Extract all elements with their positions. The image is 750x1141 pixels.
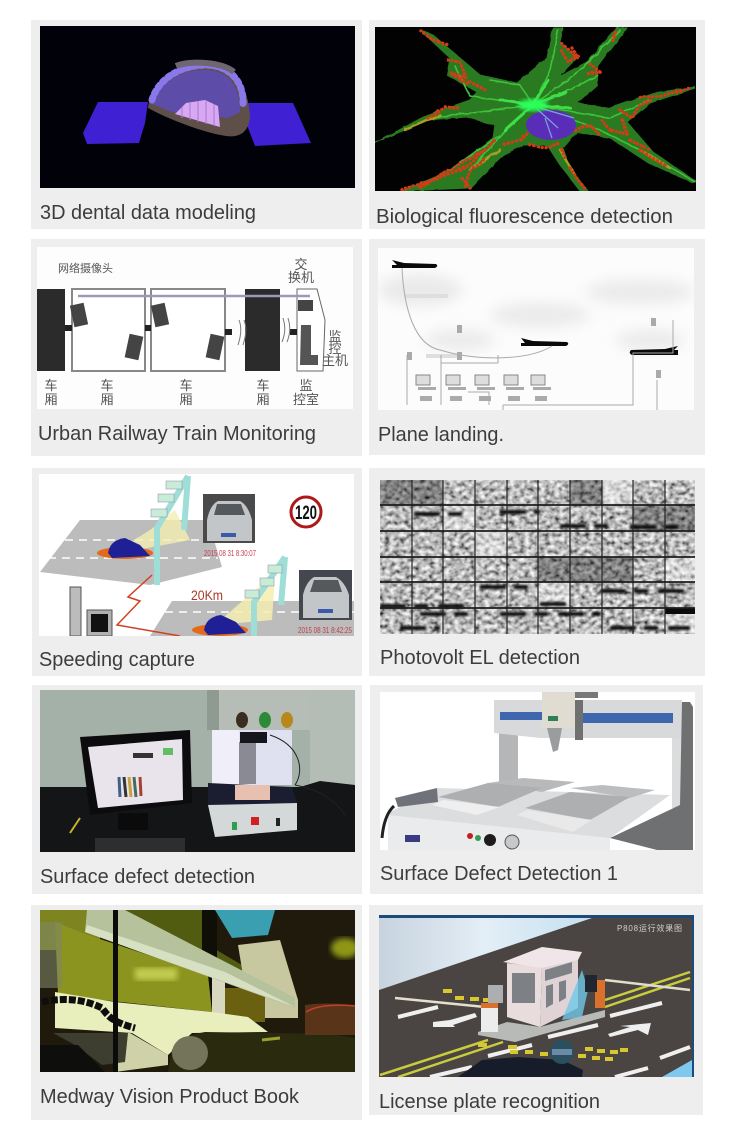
panel: Surface defect detection bbox=[32, 685, 362, 894]
photo: train camera network diagram: 车 bbox=[100, 378, 114, 393]
caption: Biological fluorescence detection bbox=[376, 206, 673, 228]
photo: parking gate rendering bbox=[379, 915, 694, 1077]
panel: Medway Vision Product Book bbox=[31, 905, 362, 1120]
panel: 3D dental data modeling bbox=[31, 20, 362, 229]
photo: train camera network diagram: 厢 bbox=[256, 392, 270, 407]
caption: Surface defect detection bbox=[40, 866, 255, 888]
caption: Urban Railway Train Monitoring bbox=[38, 423, 316, 445]
caption: Plane landing. bbox=[378, 424, 504, 446]
panel: Biological fluorescence detection bbox=[369, 20, 705, 229]
photo: dental scan on black bbox=[40, 26, 355, 188]
photo: train camera network diagram: 车 bbox=[44, 378, 58, 393]
photo: train camera network diagram bbox=[37, 247, 353, 409]
photo: plane landing diagram bbox=[378, 248, 694, 410]
panel: License plate recognition bbox=[369, 905, 703, 1115]
caption: Photovolt EL detection bbox=[380, 647, 580, 669]
panel: Plane landing bbox=[369, 239, 705, 455]
photo: train camera network diagram: 控 bbox=[328, 341, 342, 356]
photo: train camera network diagram: 厢 bbox=[179, 392, 193, 407]
photo: train camera network diagram: 监 bbox=[328, 329, 342, 344]
photo: inspection station with monitor bbox=[40, 690, 355, 852]
photo: fluorescent cell bbox=[375, 27, 696, 191]
photo: inspection of film roll under light bbox=[40, 910, 355, 1072]
photo: parking gate rendering: P808运行效果图 bbox=[617, 923, 682, 933]
photo: train camera network diagram: 控室 bbox=[293, 392, 319, 407]
caption: License plate recognition bbox=[379, 1091, 600, 1113]
caption: Speeding capture bbox=[39, 649, 195, 671]
photo: train camera network diagram: 换机 bbox=[288, 270, 314, 285]
panel: Surface Defect Detection 1 bbox=[370, 685, 703, 894]
photo: speeding capture diagram: 2015 08 31 8:30:07 bbox=[204, 549, 256, 558]
photo: train camera network diagram: 厢 bbox=[44, 392, 58, 407]
photo: train camera network diagram: 监 bbox=[299, 378, 313, 393]
caption: 3D dental data modeling bbox=[40, 202, 256, 224]
photo: photovoltaic EL image bbox=[380, 480, 695, 634]
caption: Medway Vision Product Book bbox=[40, 1086, 300, 1108]
photo: train camera network diagram: 交 bbox=[294, 257, 308, 272]
panel: Speeding capture bbox=[32, 468, 362, 676]
panel: Urban Railway Train Monitoring bbox=[31, 239, 362, 456]
photo: speeding capture diagram: 20Km bbox=[191, 587, 223, 603]
photo: train camera network diagram: 车 bbox=[256, 378, 270, 393]
photo: speeding capture diagram: 120 bbox=[295, 503, 317, 524]
photo: speeding capture diagram bbox=[39, 474, 354, 636]
panel: Photovolt EL detection bbox=[369, 468, 705, 676]
photo: gantry dispensing machine bbox=[380, 692, 695, 850]
photo: train camera network diagram: 主机 bbox=[322, 353, 348, 368]
photo: train camera network diagram: 网络摄像头 bbox=[58, 261, 113, 275]
caption: Surface Defect Detection 1 bbox=[380, 863, 618, 885]
photo: train camera network diagram: 车 bbox=[179, 378, 193, 393]
photo: train camera network diagram: 厢 bbox=[100, 392, 114, 407]
